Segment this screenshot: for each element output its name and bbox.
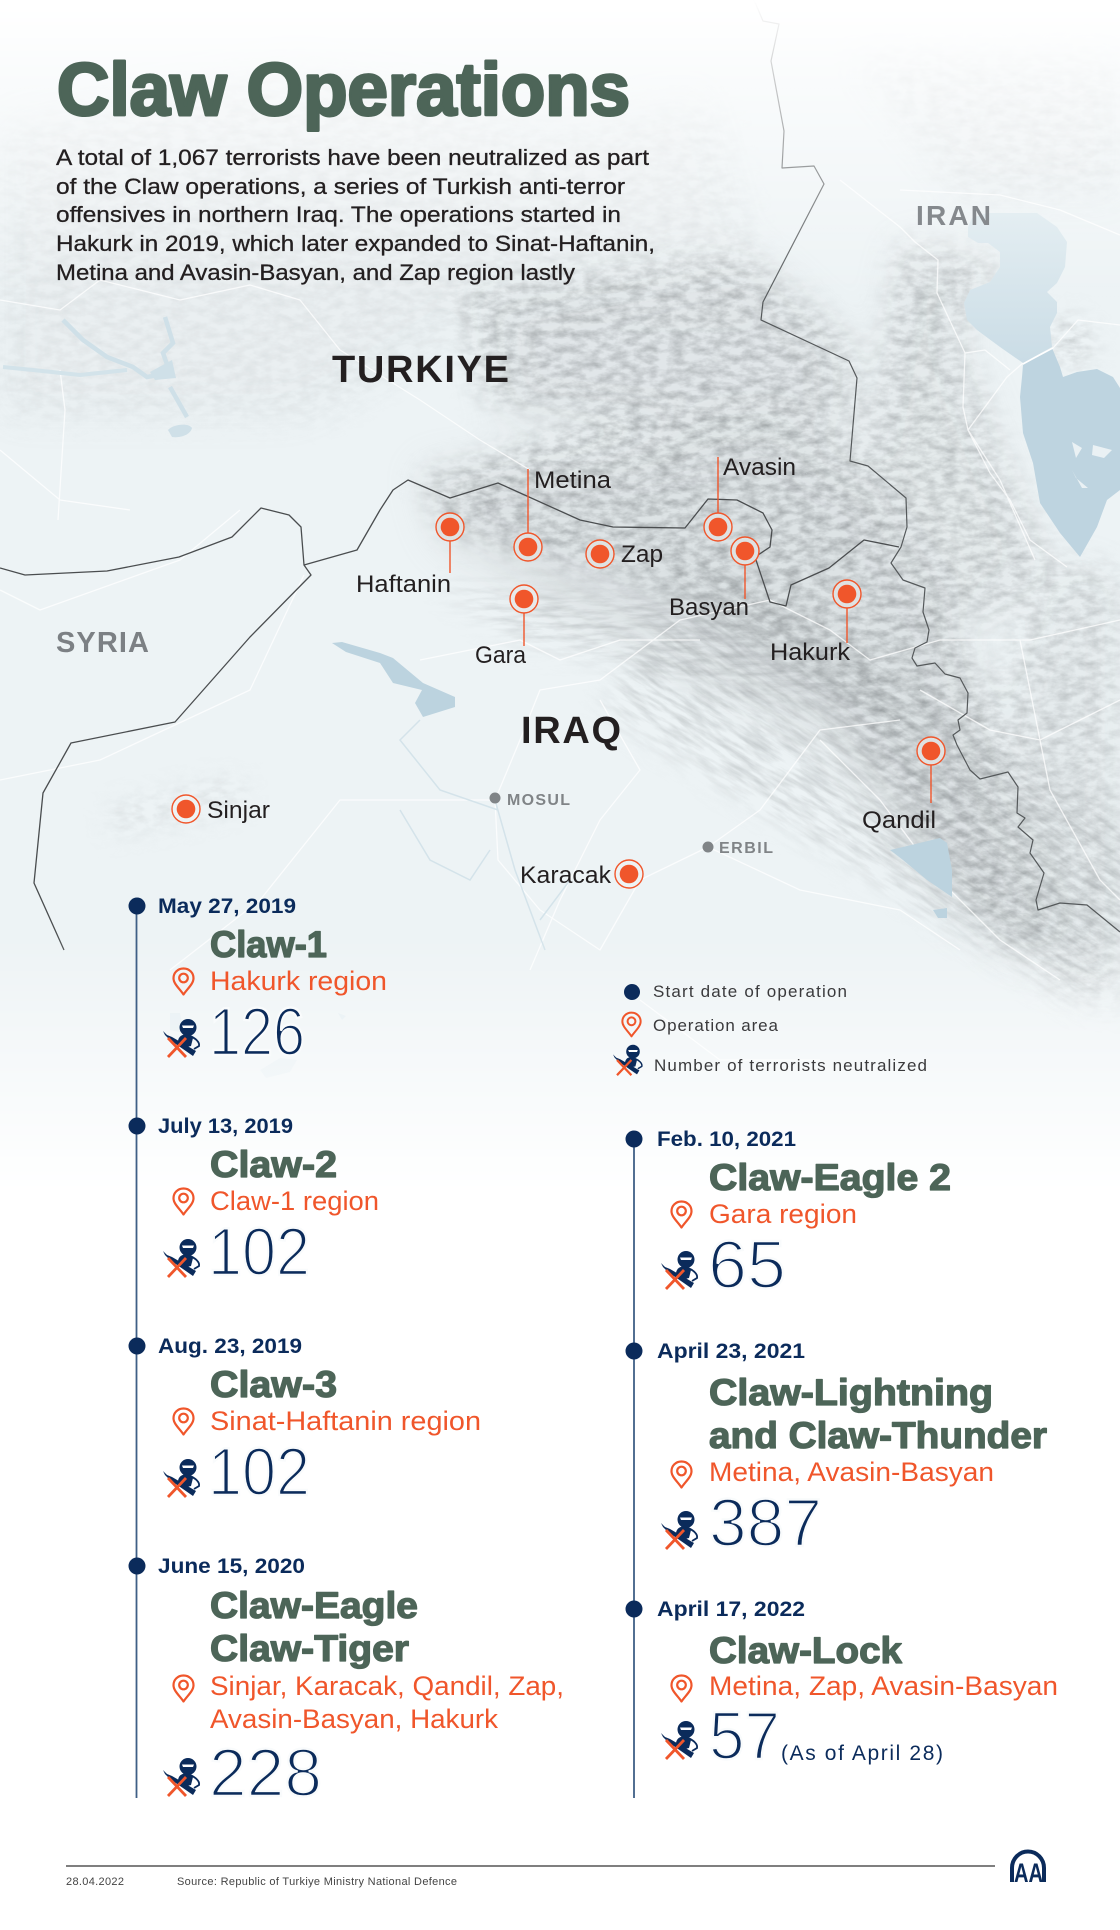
fade overlays (0, 0, 1120, 1200)
entry: Claw-Lightning and Claw-Thunder: Metina, Avasin-Basyan (709, 1457, 994, 1487)
entry: Claw-3: Claw-3 (210, 1364, 337, 1405)
entry: Claw-Lock: Claw-Lock (709, 1630, 902, 1671)
footer date: 28.04.2022 (66, 1876, 124, 1888)
entry: Claw-Lock: April 17, 2022 (657, 1598, 805, 1621)
marker: Metina (514, 467, 612, 561)
entry: Claw-Eagle / Claw-Tiger: Avasin-Basyan, Hakurk (210, 1704, 499, 1734)
borders (0, 0, 1120, 950)
entry: Claw-Lightning and Claw-Thunder: and Claw-Thunder (709, 1415, 1047, 1456)
city: Erbil: ERBIL (719, 840, 773, 857)
timeline: right line (633, 1138, 635, 1798)
entry: Claw-Eagle / Claw-Tiger: Claw-Tiger (210, 1628, 409, 1669)
marker: Gara (475, 585, 538, 669)
marker: Avasin (704, 454, 796, 541)
entry: Claw-Eagle / Claw-Tiger: 228 (209, 1735, 322, 1811)
entry: Claw-2 (128, 1115, 379, 1290)
timeline: left line (136, 906, 138, 1798)
entry: Claw-Eagle 2: Feb. 10, 2021 (657, 1128, 796, 1151)
marker: Karacak (520, 860, 643, 889)
country label: Iran: IRAN (916, 200, 991, 231)
entry: Claw-Lock: 57 (709, 1698, 780, 1774)
marker: Hakurk (770, 580, 861, 666)
entry: Claw-Eagle 2: Claw-Eagle 2 (709, 1157, 951, 1198)
marker: Basyan: Basyan (669, 594, 749, 621)
intro text (56, 145, 655, 285)
marker: Haftanin: Haftanin (356, 571, 451, 598)
entry: Claw-1 (128, 895, 387, 1070)
marker: Zap (586, 540, 663, 568)
entry: Claw-Lightning and Claw-Thunder: Claw-Lightning (709, 1372, 993, 1413)
intro text: Metina and Avasin-Basyan, and Zap region lastly (56, 260, 575, 285)
entry: Claw-1: May 27, 2019 (158, 895, 296, 918)
intro text: Hakurk in 2019, which later expanded to Sinat-Haftanin, (56, 231, 655, 256)
marker: Avasin: Avasin (723, 454, 796, 481)
entry: Claw-Eagle 2: 65 (708, 1227, 786, 1303)
entry: Claw-Eagle / Claw-Tiger: Sinjar, Karacak, Qandil, Zap, (210, 1671, 564, 1701)
entry: Claw-Lightning and Claw-Thunder: April 23, 2021 (657, 1340, 805, 1363)
map background (0, 0, 1120, 1200)
intro text: A total of 1,067 terrorists have been neutralized as part (56, 145, 649, 170)
entry: Claw-1: Hakurk region (210, 966, 387, 996)
country label: Syria: SYRIA (56, 627, 149, 659)
entry: Claw-3: Sinat-Haftanin region (210, 1406, 481, 1436)
entry: Claw-1: 126 (209, 994, 305, 1070)
legend: neutralized: Number of terrorists neutralized (654, 1056, 927, 1075)
entry: Claw-Eagle 2 (626, 1128, 951, 1303)
entry: Claw-Lock (626, 1598, 1058, 1774)
intro text: of the Claw operations, a series of Turkish anti-terror (56, 174, 625, 199)
marker: Qandil (862, 737, 945, 834)
entry: Claw-Eagle / Claw-Tiger: Claw-Eagle (210, 1585, 418, 1626)
entry: Claw-2: Claw-1 region (210, 1186, 379, 1216)
marker: Hakurk: Hakurk (770, 639, 851, 666)
entry: Claw-2: July 13, 2019 (158, 1115, 293, 1138)
marker: Haftanin (356, 513, 464, 598)
entry: Claw-Lightning and Claw-Thunder: 387 (709, 1485, 822, 1561)
legend: neutralized (613, 1045, 927, 1075)
marker: Zap: Zap (621, 541, 663, 568)
marker: Sinjar (172, 795, 270, 824)
entry: Claw-Eagle / Claw-Tiger: June 15, 2020 (158, 1555, 305, 1578)
entry: Claw-Lock: (As of April 28) (781, 1742, 943, 1765)
entry: Claw-3: Aug. 23, 2019 (158, 1335, 302, 1358)
entry: Claw-Eagle 2: Gara region (709, 1199, 857, 1229)
legend: operation area (622, 1013, 779, 1036)
marker: Karacak: Karacak (520, 862, 612, 889)
footer rule (66, 1865, 995, 1867)
legend: start date: Start date of operation (653, 982, 847, 1001)
entry: Claw-3 (128, 1335, 481, 1510)
country label: Turkiye: TURKIYE (332, 349, 509, 391)
roads (0, 180, 1120, 1060)
terrain shading (0, 50, 1120, 1010)
marker: Sinjar: Sinjar (207, 797, 270, 824)
marker: Gara: Gara (475, 642, 527, 669)
legend (613, 982, 927, 1075)
title: Claw Operations (57, 48, 630, 131)
legend: operation area: Operation area (653, 1016, 779, 1035)
city: Mosul: MOSUL (507, 792, 570, 809)
entry: Claw-3: 102 (208, 1434, 310, 1510)
logo: AA: AA (1014, 1858, 1043, 1888)
marker: Basyan (669, 537, 759, 621)
entry: Claw-1: Claw-1 (210, 924, 327, 965)
entry: Claw-Lock: Metina, Zap, Avasin-Basyan (709, 1671, 1058, 1701)
country label: Iraq: IRAQ (521, 710, 621, 752)
marker: Metina: Metina (534, 467, 612, 494)
marker: Qandil: Qandil (862, 807, 936, 834)
entry: Claw-2: 102 (208, 1214, 310, 1290)
entry: Claw-Lightning and Claw-Thunder (626, 1340, 1047, 1561)
lakes and rivers (3, 317, 952, 1078)
entry: Claw-Eagle / Claw-Tiger (128, 1555, 564, 1811)
lake Urmia (964, 213, 1120, 557)
intro text: offensives in northern Iraq. The operations started in (56, 202, 621, 227)
footer source: Source: Republic of Turkiye Ministry National Defence (177, 1876, 457, 1888)
entry: Claw-2: Claw-2 (210, 1144, 337, 1185)
logo: AA (1012, 1851, 1044, 1888)
